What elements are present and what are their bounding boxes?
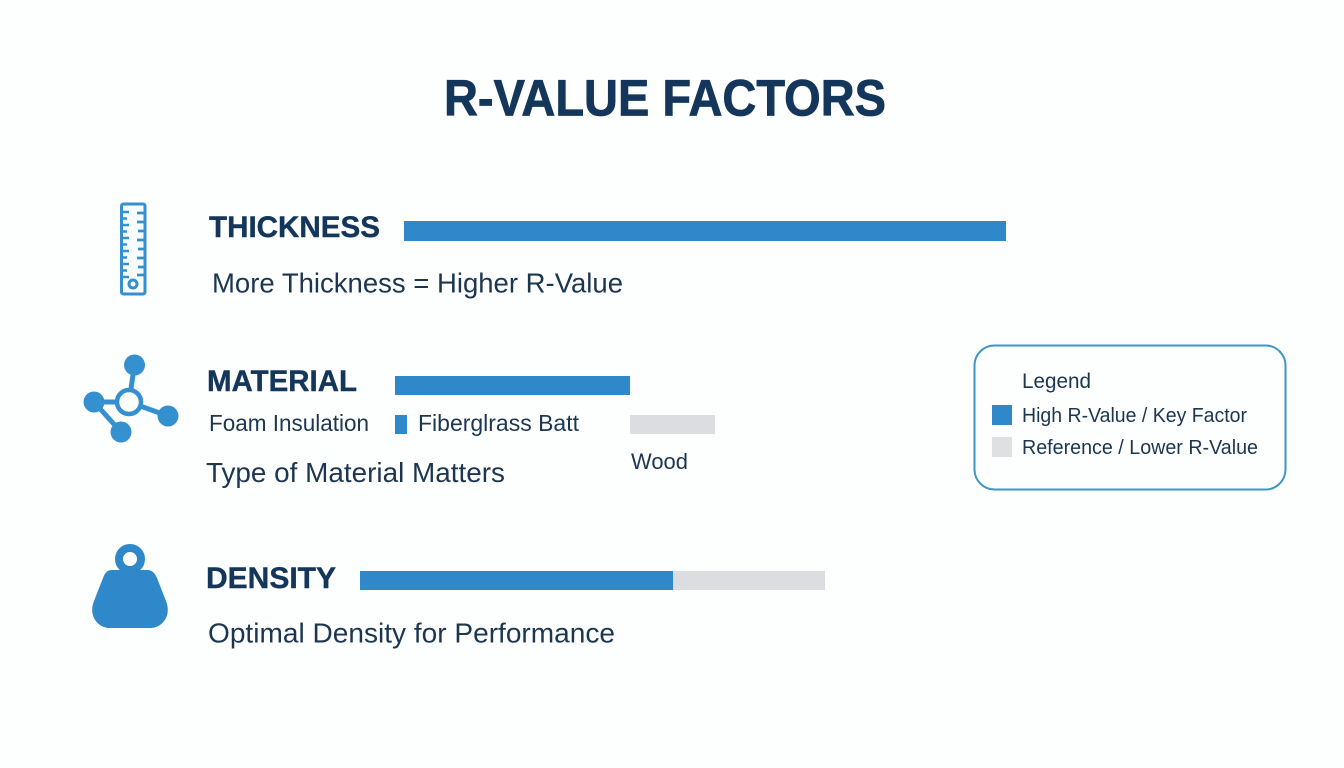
bar: foam insulation [395, 376, 630, 395]
title: R-VALUE FACTORS [444, 70, 886, 126]
label: foam insulation: Foam Insulation [209, 410, 369, 436]
icon: ruler [122, 204, 145, 294]
icon: network [84, 354, 178, 442]
legend [974, 346, 1286, 490]
legend label: reference: Reference / Lower R-Value [1022, 437, 1258, 459]
bar: fiberglass batt [395, 415, 407, 434]
text: material note: Type of Material Matters [206, 457, 505, 488]
text: density note: Optimal Density for Performance [208, 618, 615, 648]
panel: density [92, 548, 825, 648]
bar: density reference [673, 571, 825, 590]
bar: density optimal [360, 571, 673, 590]
legend title: Legend [1022, 370, 1091, 393]
heading: density: DENSITY [206, 562, 336, 595]
icon: weight [92, 548, 168, 628]
heading: thickness: THICKNESS [209, 211, 380, 244]
legend swatch: high [992, 405, 1012, 425]
panel: material [84, 354, 715, 488]
legend swatch: reference [992, 437, 1012, 457]
legend label: high: High R-Value / Key Factor [1022, 405, 1247, 427]
label: wood: Wood [631, 449, 688, 474]
text: thickness note: More Thickness = Higher R-Value [212, 268, 623, 298]
bar: thickness [404, 221, 1006, 241]
heading: material: MATERIAL [207, 365, 357, 398]
panel: thickness [122, 204, 1006, 298]
label: fiberglass batt: Fiberglrass Batt [418, 410, 580, 436]
bar: wood [630, 415, 715, 434]
